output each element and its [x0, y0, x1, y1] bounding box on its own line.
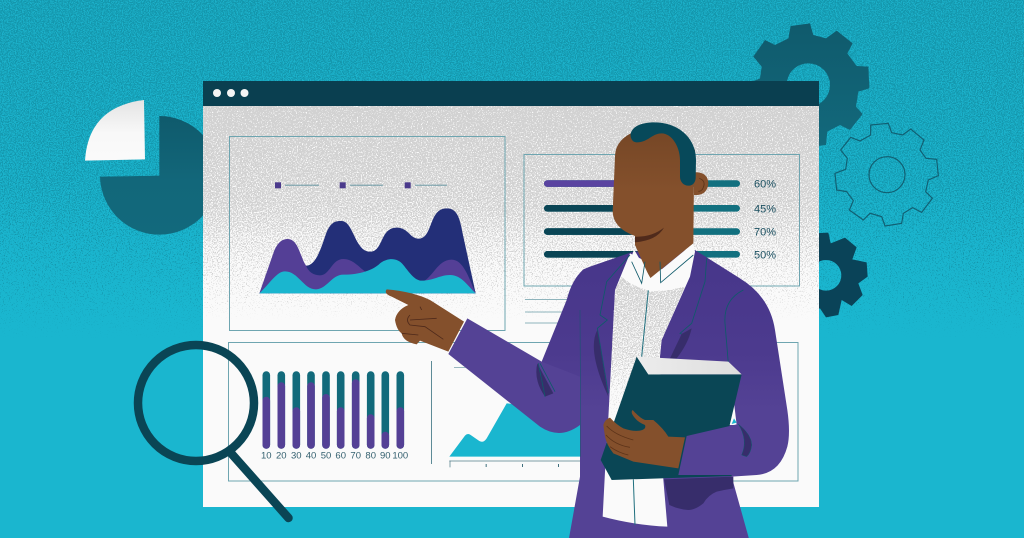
coat hem shadow — [664, 477, 733, 510]
jaw shadow — [635, 228, 664, 242]
panel frame — [230, 136, 505, 330]
lapel shadows — [594, 328, 692, 397]
axis labels: 30 — [291, 450, 302, 462]
book — [601, 357, 742, 480]
book pages — [637, 357, 742, 374]
panel: horizontal progress bars — [524, 154, 800, 324]
hand lines — [606, 426, 633, 455]
bar row 50%: 50% — [754, 250, 776, 262]
shirt placket — [633, 290, 648, 525]
axis labels: 90 — [380, 450, 391, 462]
stacked area chart — [259, 208, 476, 293]
axis labels: 100 — [392, 450, 408, 462]
vertical bar chart — [261, 371, 408, 462]
coat seam — [579, 310, 582, 457]
pie body — [100, 116, 219, 235]
elbow crease — [536, 363, 553, 397]
panel frame — [524, 154, 800, 286]
axis labels: 40 — [306, 450, 316, 462]
shirt — [603, 252, 695, 527]
hair — [631, 122, 696, 186]
panel: area chart — [230, 136, 505, 330]
axis labels: 20 — [276, 450, 287, 462]
icon: pie chart — [85, 100, 219, 235]
panel: lower charts — [228, 342, 798, 481]
axis labels: 80 — [365, 450, 376, 462]
presenter figure — [386, 122, 789, 538]
teal area chart — [449, 367, 587, 467]
bar row 60%: 60% — [754, 178, 776, 190]
axis labels — [261, 450, 408, 462]
icon: large gear — [748, 23, 869, 147]
browser window — [203, 81, 819, 507]
divider — [431, 361, 432, 464]
pointing hand — [386, 289, 464, 352]
icon: outline gear — [835, 123, 938, 226]
neck and head — [613, 132, 695, 278]
bar row 70%: 70% — [754, 226, 776, 238]
window controls — [213, 89, 248, 97]
bar row 45%: 45% — [754, 204, 776, 216]
axis labels: 50 — [321, 450, 331, 462]
coat sleeve — [678, 424, 757, 475]
lapel lines — [597, 255, 743, 393]
caption lines — [525, 299, 570, 324]
bar row 50% — [544, 250, 776, 262]
shirt collar — [628, 243, 695, 291]
icon: magnifying glass — [138, 345, 288, 518]
coat — [542, 250, 789, 538]
axis labels: 60 — [335, 450, 346, 462]
ear — [694, 172, 708, 195]
holding hand — [603, 410, 685, 468]
shirt gap — [728, 397, 737, 425]
pie wedge — [85, 100, 145, 161]
bar row 45% — [544, 204, 776, 216]
bar row 60% — [544, 178, 776, 190]
title bar — [203, 81, 819, 106]
axis labels: 10 — [261, 450, 272, 462]
legend — [275, 182, 447, 188]
pointing arm — [448, 318, 580, 433]
window body — [203, 106, 819, 507]
pants — [601, 517, 669, 538]
bar row 70% — [544, 226, 776, 238]
panel frame — [228, 342, 798, 481]
axis labels: 70 — [350, 450, 361, 462]
icon: small dark gear — [811, 233, 868, 317]
finger lines — [402, 307, 443, 339]
sleeve crease — [738, 424, 752, 457]
